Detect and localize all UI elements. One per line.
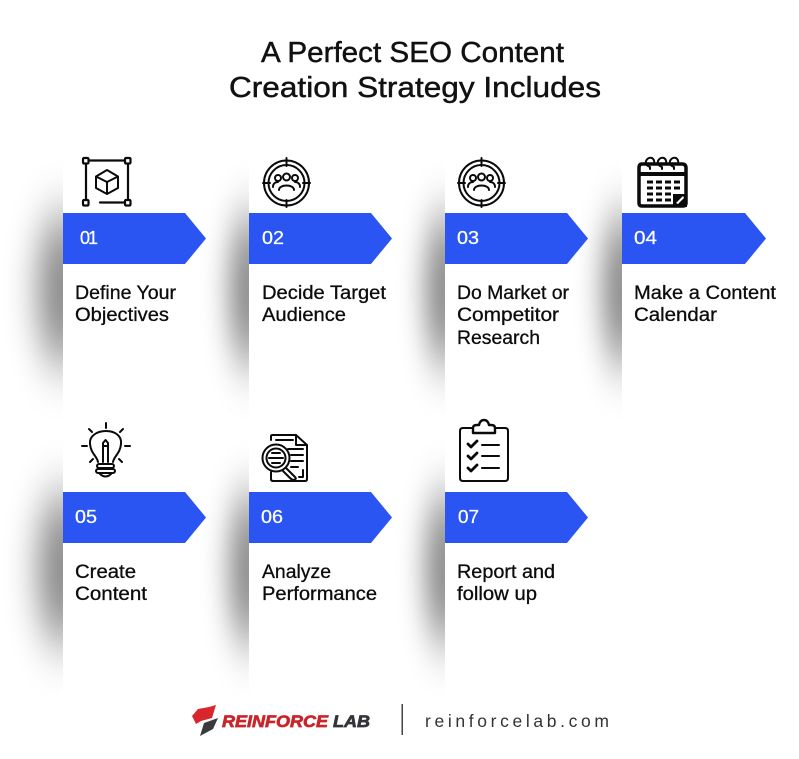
website url: reinforcelab.com bbox=[425, 711, 609, 731]
label 03: Research bbox=[457, 328, 540, 349]
icon: audience target bbox=[458, 158, 505, 207]
arrow banner 07: 07 bbox=[458, 507, 479, 527]
step 04 bbox=[622, 158, 777, 326]
footer logo bbox=[192, 705, 370, 736]
step 02 bbox=[249, 158, 392, 326]
arrow banner 02 bbox=[249, 213, 392, 264]
icon: calendar bbox=[638, 158, 687, 207]
label 01 bbox=[75, 283, 177, 326]
arrow banner 06: 06 bbox=[261, 507, 283, 527]
label 04: Calendar bbox=[634, 305, 718, 326]
label 06: Performance bbox=[262, 584, 377, 605]
label 04: Make a Content bbox=[634, 283, 777, 304]
icon: light bulb with pencil bbox=[82, 423, 130, 476]
label 03: Competitor bbox=[457, 305, 560, 326]
label 07: follow up bbox=[457, 584, 537, 605]
logo wordmark: REINFORCE LAB bbox=[222, 712, 370, 731]
step 05 bbox=[63, 423, 206, 605]
step 07 bbox=[445, 420, 588, 605]
title: A Perfect SEO Content bbox=[261, 37, 564, 69]
arrow banner 03 bbox=[445, 213, 588, 264]
label 05: Create bbox=[75, 562, 136, 583]
label 05 bbox=[75, 562, 148, 605]
footer divider bbox=[402, 704, 403, 735]
icon: logo mark bbox=[192, 705, 218, 736]
title: Creation Strategy Includes bbox=[229, 72, 601, 104]
label 06 bbox=[262, 562, 377, 605]
arrow banner 05: 05 bbox=[75, 507, 97, 527]
label 02: Decide Target bbox=[262, 283, 387, 304]
label 03: Do Market or bbox=[457, 283, 570, 304]
label 04 bbox=[634, 283, 777, 326]
step 01 bbox=[63, 158, 206, 326]
icon: clipboard checklist bbox=[460, 420, 508, 481]
arrow banner 01 bbox=[63, 213, 206, 264]
label 01: Objectives bbox=[75, 305, 169, 326]
arrow banner 02: 02 bbox=[262, 228, 284, 248]
label 01: Define Your bbox=[75, 283, 177, 304]
title bbox=[229, 37, 601, 104]
label 02 bbox=[262, 283, 387, 326]
column shadows bbox=[39, 212, 641, 647]
arrow banner 01: 01 bbox=[80, 228, 98, 248]
icon: document with magnifier bbox=[262, 435, 307, 481]
arrow banner 05 bbox=[63, 492, 206, 543]
arrow banner 03: 03 bbox=[457, 228, 479, 248]
label 02: Audience bbox=[262, 305, 346, 326]
arrow banner 07 bbox=[445, 492, 588, 543]
step 03 bbox=[445, 158, 588, 349]
label 03 bbox=[457, 283, 570, 349]
label 06: Analyze bbox=[262, 562, 331, 583]
icon: audience target bbox=[263, 158, 310, 207]
step 06 bbox=[249, 435, 392, 605]
arrow banner 04: 04 bbox=[634, 228, 657, 248]
label 07: Report and bbox=[457, 562, 555, 583]
arrow banner 06 bbox=[249, 492, 392, 543]
icon: cube in selection frame bbox=[83, 158, 130, 206]
arrow banner 04 bbox=[622, 213, 766, 264]
label 07 bbox=[457, 562, 555, 605]
label 05: Content bbox=[75, 584, 148, 605]
